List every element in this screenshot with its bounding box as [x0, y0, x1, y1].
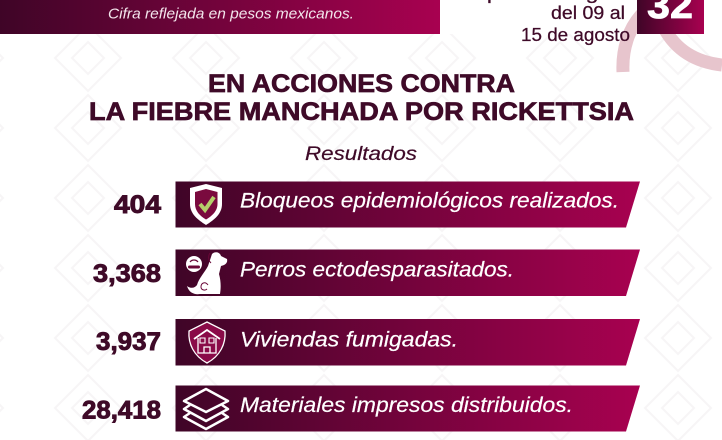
row: viviendas — [96, 319, 640, 366]
number: 3,368 — [93, 260, 161, 288]
label: Viviendas fumigadas. — [240, 328, 458, 352]
bar — [176, 386, 640, 432]
decorative pink arcs — [623, 12, 722, 72]
label: Perros ectodesparasitados. — [240, 258, 514, 282]
number: 3,937 — [96, 328, 161, 356]
bar — [176, 182, 640, 228]
date range: 15 de agosto — [521, 25, 630, 45]
row: perros — [93, 250, 640, 296]
bar — [176, 250, 640, 296]
icon: dog with antiparasitic — [186, 252, 227, 294]
date range — [474, 0, 630, 45]
bar — [176, 319, 640, 366]
icon: house shield — [189, 322, 225, 363]
top banner — [0, 0, 440, 34]
number: 404 — [114, 191, 161, 219]
title: LA FIEBRE MANCHADA POR RICKETTSIA — [89, 98, 634, 126]
subtitle: Resultados — [305, 144, 418, 165]
row: bloqueos — [114, 182, 640, 228]
icon: shield check — [190, 184, 222, 225]
week number box — [637, 0, 704, 34]
number: 28,418 — [82, 396, 161, 424]
row: materiales — [82, 386, 640, 432]
label: Bloqueos epidemiológicos realizados. — [240, 190, 619, 212]
title: EN ACCIONES CONTRA — [208, 70, 515, 98]
title — [89, 70, 634, 126]
date range: del 09 al — [551, 3, 625, 23]
label: Materiales impresos distribuidos. — [240, 394, 573, 417]
banner note: Cifra reflejada en pesos mexicanos. — [108, 6, 354, 22]
icon: layers — [184, 389, 228, 429]
